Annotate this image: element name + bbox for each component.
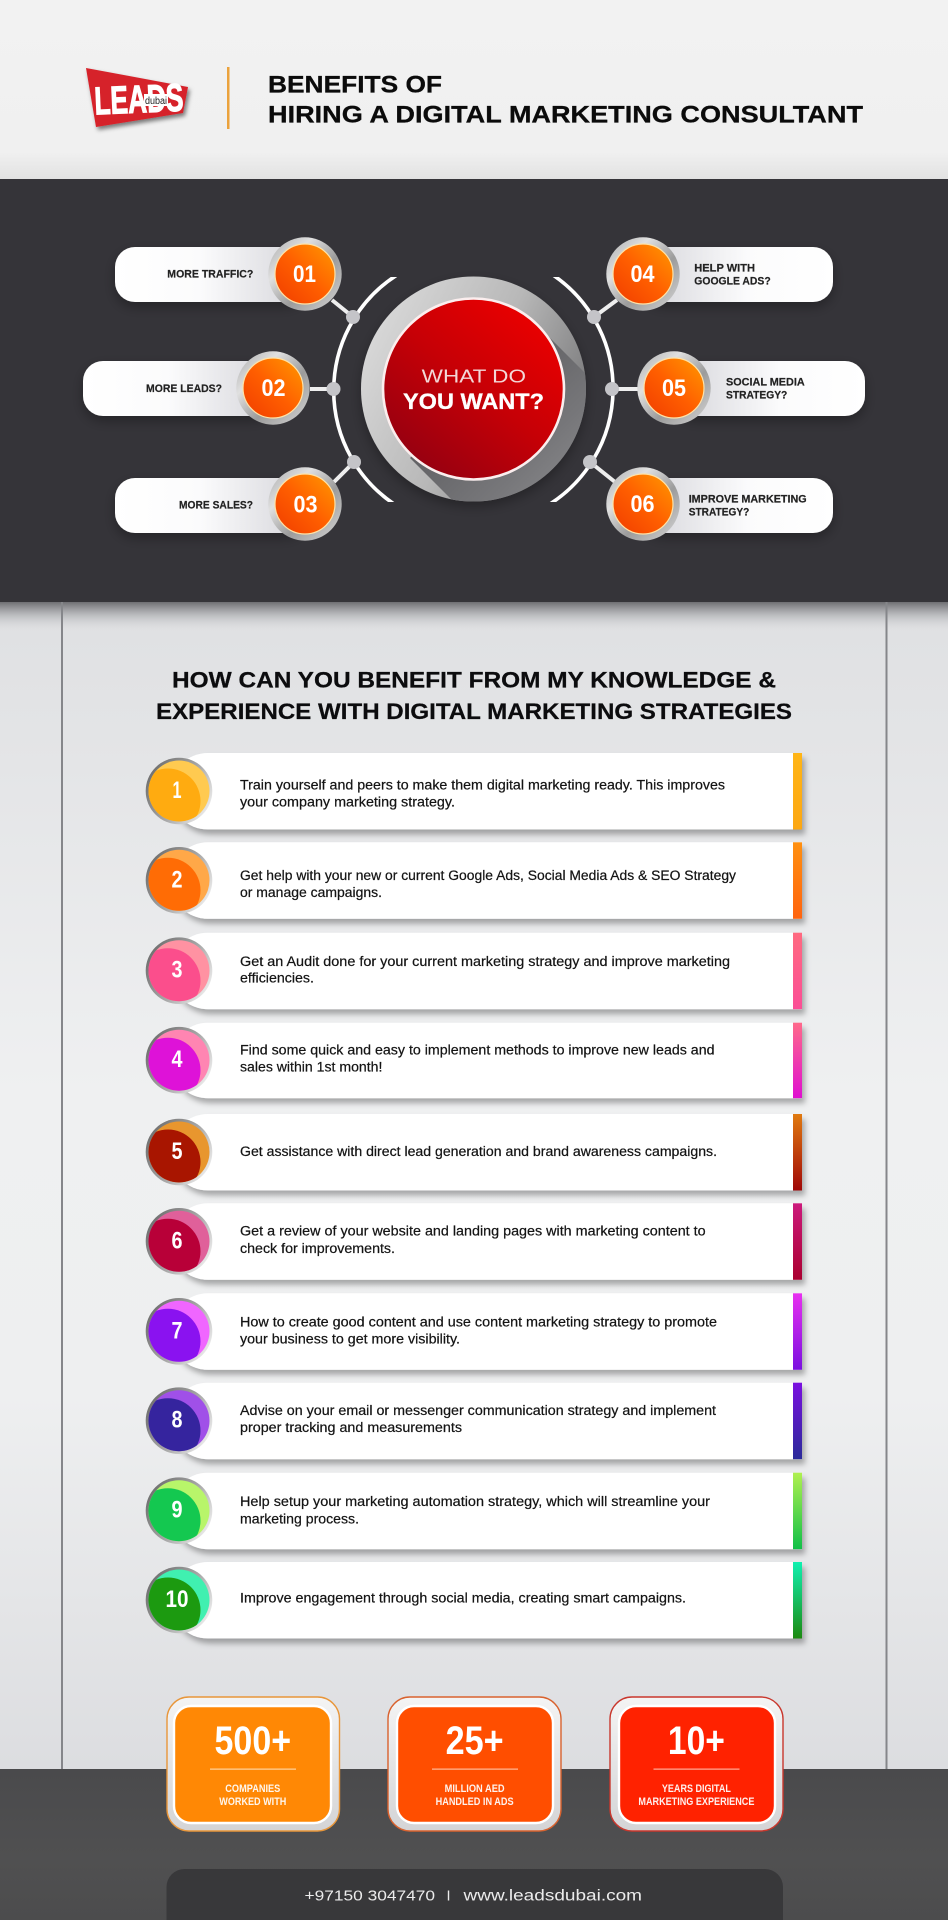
title: HIRING A DIGITAL MARKETING CONSULTANT xyxy=(268,102,863,129)
list item 2 xyxy=(136,842,802,923)
list item 1: Train yourself and peers to make them digital marketing ready. This improves xyxy=(240,777,725,792)
item 05: STRATEGY? xyxy=(726,389,787,401)
list item 10: Improve engagement through social media, creating smart campaigns. xyxy=(240,1590,686,1605)
item 06: STRATEGY? xyxy=(689,507,749,519)
item 04: GOOGLE ADS? xyxy=(694,275,771,287)
section heading xyxy=(156,667,792,724)
list item 6 xyxy=(136,1203,802,1284)
item 01 xyxy=(115,237,342,311)
stat card: 10+: 10+ xyxy=(668,1719,725,1763)
central text xyxy=(403,365,544,414)
list item 8: 8 xyxy=(172,1407,182,1434)
list item 7: How to create good content and use content marketing strategy to promote xyxy=(240,1315,717,1330)
panel: what do you want xyxy=(0,179,948,602)
footer band xyxy=(0,1769,948,1920)
item 05: SOCIAL MEDIA xyxy=(726,376,805,388)
contact bar: www.leadsdubai.com xyxy=(462,1888,642,1905)
list item 5: Get assistance with direct lead generation and brand awareness campaigns. xyxy=(240,1144,717,1159)
list item 2: or manage campaigns. xyxy=(240,885,382,900)
central circle xyxy=(361,276,586,506)
item 06: 06 xyxy=(630,491,654,518)
item 04: HELP WITH xyxy=(694,262,755,274)
list item 4: 4 xyxy=(172,1046,183,1073)
logo: LEADS dubai: LEADS xyxy=(93,77,184,123)
item 04: 04 xyxy=(630,261,655,288)
section heading: EXPERIENCE WITH DIGITAL MARKETING STRATEGIES xyxy=(156,699,792,724)
list item 3: Get an Audit done for your current marketing strategy and improve marketing xyxy=(240,954,730,969)
list item 4 xyxy=(136,1023,802,1103)
central text: WHAT DO xyxy=(422,365,526,386)
item 05: 05 xyxy=(662,375,686,402)
item 06: IMPROVE MARKETING xyxy=(689,493,807,505)
stat card: 25+ xyxy=(388,1697,561,1831)
title: BENEFITS OF xyxy=(268,72,442,99)
header divider xyxy=(227,67,230,129)
list item 7 xyxy=(136,1293,802,1374)
logo: LEADS dubai xyxy=(86,68,188,127)
header panel xyxy=(0,0,948,179)
list item 3: efficiencies. xyxy=(240,971,314,986)
stat card: 25+: 25+ xyxy=(446,1719,504,1763)
stat card: 25+: MILLION AED xyxy=(445,1783,505,1795)
stat card: 10+: MARKETING EXPERIENCE xyxy=(638,1796,754,1808)
list item 1 xyxy=(136,753,802,834)
section heading: HOW CAN YOU BENEFIT FROM MY KNOWLEDGE & xyxy=(172,667,776,692)
list item 4: sales within 1st month! xyxy=(240,1060,382,1075)
list item 5: 5 xyxy=(172,1138,182,1165)
contact bar: +97150 3047470 xyxy=(304,1889,435,1905)
list item 3: 3 xyxy=(172,957,182,984)
item 02: MORE LEADS? xyxy=(146,383,222,395)
list item 9: marketing process. xyxy=(240,1511,359,1526)
list item 8: Advise on your email or messenger communication strategy and implement xyxy=(240,1403,716,1418)
logo: LEADS dubai: dubai xyxy=(145,96,167,107)
stat card: 10+ xyxy=(610,1697,783,1831)
item 03: MORE SALES? xyxy=(179,500,253,512)
list item 10 xyxy=(136,1562,802,1642)
item 05 xyxy=(637,351,865,425)
list item 8: proper tracking and measurements xyxy=(240,1420,462,1435)
stat card: 500+ xyxy=(167,1697,340,1831)
list item 1: your company marketing strategy. xyxy=(240,795,455,810)
list item 10: 10 xyxy=(166,1586,188,1613)
stat card: 500+: COMPANIES xyxy=(225,1783,280,1795)
list item 4: Find some quick and easy to implement methods to improve new leads and xyxy=(240,1042,714,1057)
list item 9 xyxy=(136,1473,802,1553)
list item 5 xyxy=(136,1114,802,1194)
list item 8 xyxy=(136,1383,802,1463)
arcs and connectors xyxy=(310,275,638,504)
item 06 xyxy=(606,467,833,541)
item 02: 02 xyxy=(262,375,286,402)
list item 7: 7 xyxy=(172,1317,182,1344)
item 03: 03 xyxy=(294,492,318,518)
list item 9: 9 xyxy=(172,1497,182,1524)
list item 6: 6 xyxy=(172,1227,182,1254)
list item 2: 2 xyxy=(172,866,182,893)
list item 2: Get help with your new or current Google Ads, Social Media Ads & SEO Strategy xyxy=(240,868,736,883)
item 02 xyxy=(83,351,310,425)
central text: YOU WANT? xyxy=(403,389,544,414)
stat card: 25+: HANDLED IN ADS xyxy=(436,1796,514,1808)
item 04 xyxy=(606,237,833,311)
stat card: 500+: WORKED WITH xyxy=(219,1796,286,1808)
item 01: MORE TRAFFIC? xyxy=(167,269,253,281)
item 01: 01 xyxy=(293,261,316,288)
list item 3 xyxy=(136,933,802,1013)
title xyxy=(268,72,863,129)
contact bar: I xyxy=(446,1889,451,1905)
stat card: 10+: YEARS DIGITAL xyxy=(662,1783,731,1795)
list item 1: 1 xyxy=(172,777,182,804)
list item 6: Get a review of your website and landing pages with marketing content to xyxy=(240,1224,706,1239)
list item 9: Help setup your marketing automation strategy, which will streamline your xyxy=(240,1494,711,1509)
contact bar xyxy=(166,1869,783,1920)
main background with side rules xyxy=(0,602,948,1769)
list item 7: your business to get more visibility. xyxy=(240,1332,460,1347)
item 03 xyxy=(115,467,342,541)
list item 6: check for improvements. xyxy=(240,1241,395,1256)
stat card: 500+: 500+ xyxy=(215,1719,291,1763)
